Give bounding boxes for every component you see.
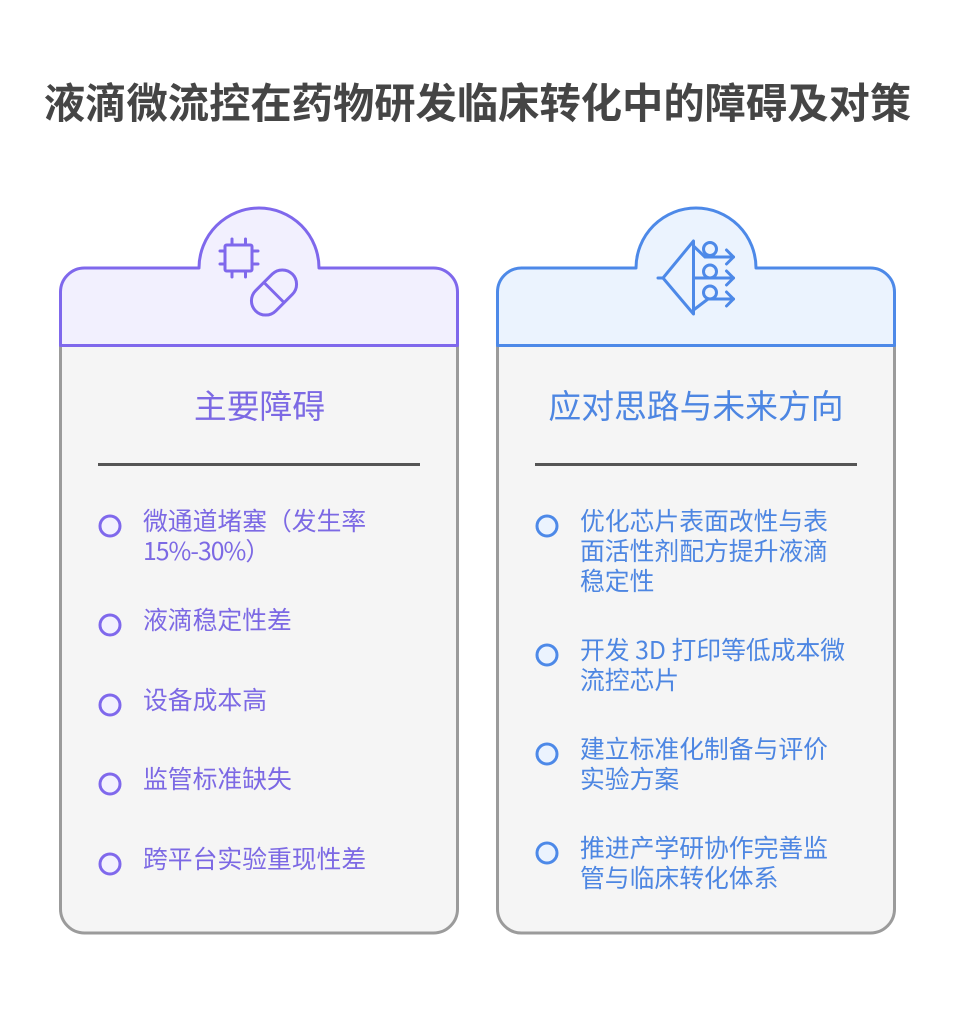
- divider: [535, 463, 857, 466]
- list item 1: [537, 502, 828, 598]
- panel header with arch: [498, 208, 895, 346]
- list item 1: ）: [245, 532, 270, 568]
- list item 5: 跨平台实验重现性差: [143, 840, 366, 876]
- list item 4: 推进产学研协作完善监: [580, 829, 828, 865]
- list item 4: 管与临床转化体系: [580, 859, 778, 895]
- list item 2: 开发 3D 打印等低成本微: [580, 631, 845, 667]
- list item 3: 设备成本高: [143, 681, 267, 717]
- list item 1: 稳定性: [580, 562, 654, 598]
- heading: main obstacles: 主要障碍: [194, 381, 325, 428]
- icon: decision branching: [658, 241, 734, 314]
- panel body: [498, 346, 895, 933]
- list item 2: 流控芯片: [580, 661, 679, 697]
- icon: chip and capsule: [220, 239, 302, 321]
- list item 1: 15%-30%: [143, 532, 245, 568]
- list item 3: [537, 730, 828, 796]
- list item 3: 建立标准化制备与评价: [580, 730, 828, 766]
- panel body: [60, 346, 458, 933]
- list item 1: [100, 502, 366, 568]
- list item 1: 优化芯片表面改性与表: [580, 502, 828, 538]
- list item 2: [537, 631, 845, 697]
- panel header with arch: [60, 208, 458, 346]
- title: 液滴微流控在药物研发临床转化中的障碍及对策: [44, 70, 911, 130]
- panel: responses and future directions: [498, 208, 895, 933]
- list item 1: 微通道堵塞（发生率: [143, 502, 366, 538]
- list item 3: 实验方案: [580, 760, 679, 796]
- list item 4: 监管标准缺失: [143, 760, 292, 796]
- heading: responses and future directions: 应对思路与未来方向: [548, 381, 844, 428]
- list item 2: 液滴稳定性差: [143, 601, 292, 637]
- list item 4: [537, 829, 828, 895]
- list item 1: 面活性剂配方提升液滴: [580, 532, 828, 568]
- divider: [98, 463, 420, 466]
- panel: main obstacles: [60, 208, 458, 933]
